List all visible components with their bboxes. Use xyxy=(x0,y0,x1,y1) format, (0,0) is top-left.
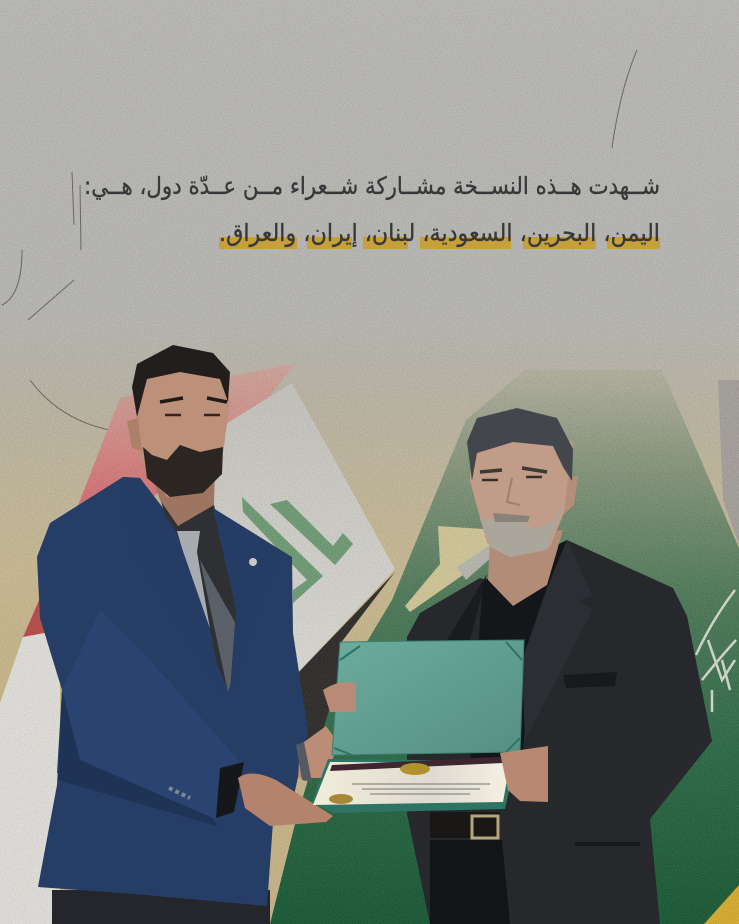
folder cover xyxy=(332,640,524,755)
calligraphy xyxy=(696,590,736,712)
left man tie xyxy=(177,531,210,629)
folder lower part xyxy=(312,759,516,813)
left man jacket xyxy=(37,477,308,906)
left man cuff xyxy=(216,762,244,818)
left man hand xyxy=(238,773,333,826)
certificate sheet xyxy=(313,762,510,805)
heading line 1: شــهدت هــذه النســخة مشــاركة شــعراء مــن عــدّة دول، هــي: xyxy=(84,172,660,200)
left man head xyxy=(137,372,230,497)
gold fringe xyxy=(704,885,739,924)
right man lapels xyxy=(522,540,593,740)
right man shirt xyxy=(470,540,567,760)
left man sleeve shade xyxy=(57,610,240,822)
black flag band xyxy=(293,572,395,780)
right man belt xyxy=(430,812,500,838)
right man trousers xyxy=(430,840,510,924)
flag emblem xyxy=(242,497,353,603)
left man right lapel xyxy=(213,508,283,690)
left man trousers xyxy=(52,890,270,924)
hand behind folder xyxy=(323,682,356,712)
left man wrist watch hand xyxy=(298,726,340,778)
right man neck xyxy=(488,530,563,606)
highlighted country list: اليمن، البحرين، السعودية، لبنان، إيران، والعراق. xyxy=(219,219,660,248)
left man neck xyxy=(150,465,215,526)
right man sleeve xyxy=(547,727,712,819)
backdrop: green banner xyxy=(270,370,739,924)
certificate seal xyxy=(400,763,430,775)
left man shirt xyxy=(160,498,247,690)
man on the right xyxy=(407,408,712,924)
right man head xyxy=(470,425,573,557)
pink flag band xyxy=(77,363,296,508)
certificate folder xyxy=(312,640,548,813)
man on the left xyxy=(37,345,340,924)
right man hand xyxy=(500,746,548,802)
backdrop: Iraqi flag panel xyxy=(0,363,395,924)
white flag band xyxy=(200,383,395,678)
gold plaque xyxy=(405,526,493,612)
left man left lapel xyxy=(123,477,223,694)
certificate banner xyxy=(330,757,503,771)
right man jacket xyxy=(407,540,712,924)
flag lower left xyxy=(0,598,60,924)
